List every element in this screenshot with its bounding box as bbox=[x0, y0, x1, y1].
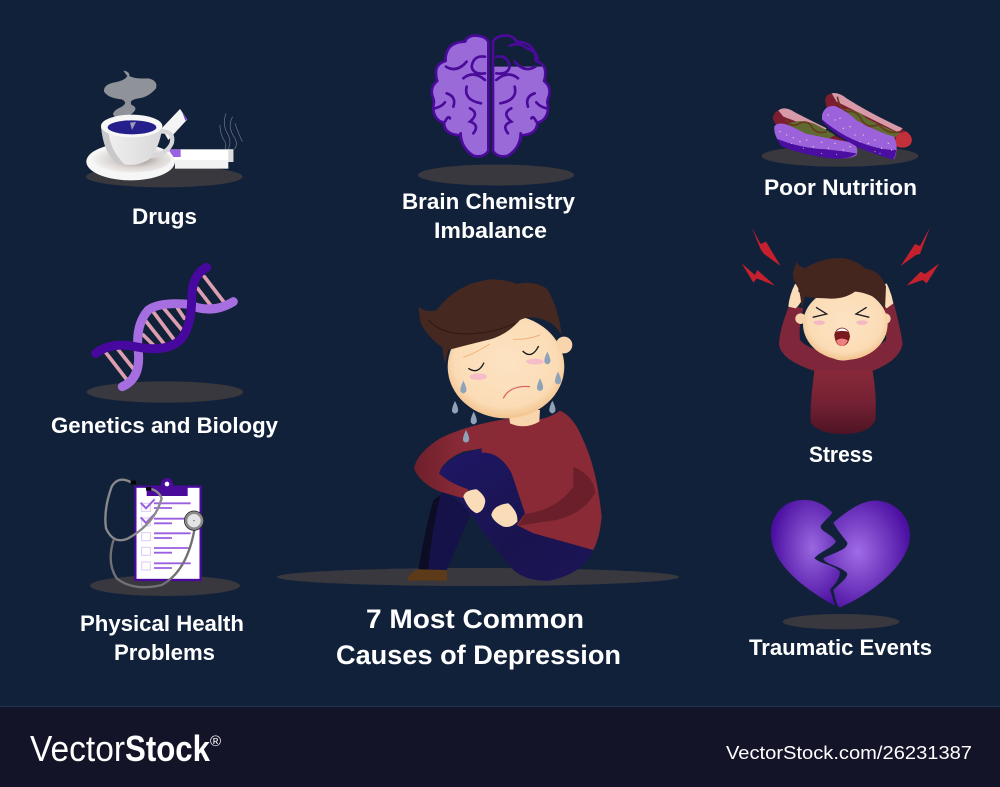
ear tips bbox=[131, 481, 136, 484]
shadow bbox=[90, 575, 240, 596]
mouth bbox=[503, 386, 530, 398]
blush bbox=[470, 373, 487, 380]
label: Stress: Stress bbox=[809, 442, 873, 467]
head bbox=[803, 288, 888, 360]
neck bbox=[508, 410, 540, 426]
right hot dog bbox=[822, 93, 912, 160]
label: Physical Health Problems bbox=[80, 611, 244, 665]
right piece bbox=[823, 501, 910, 607]
shadow bbox=[783, 614, 899, 629]
mouth bbox=[834, 328, 850, 346]
shadow bbox=[762, 145, 918, 167]
icon: stress (man holding head) bbox=[742, 227, 939, 434]
icon: genetics (DNA helix) bbox=[87, 267, 243, 403]
label: Brain Chemistry Imbalance: Brain Chemistry bbox=[402, 189, 576, 214]
thin smoke bbox=[220, 113, 242, 149]
stethoscope tubes bbox=[105, 480, 194, 587]
check marks bbox=[141, 499, 155, 523]
icon: brain bbox=[432, 36, 550, 156]
brows bbox=[463, 335, 540, 357]
footer bar bbox=[0, 706, 1000, 787]
icon: poor nutrition (hot dogs) bbox=[762, 93, 918, 167]
steam bbox=[104, 71, 156, 117]
footer logo bbox=[30, 728, 221, 769]
label: Drugs: Drugs bbox=[132, 204, 197, 229]
icon: drugs (coffee and cigarettes) bbox=[86, 71, 243, 187]
label: Poor Nutrition: Poor Nutrition bbox=[764, 175, 917, 200]
shoes bbox=[407, 569, 447, 581]
central figure: crying man bbox=[407, 279, 602, 581]
torso bbox=[482, 411, 602, 550]
shadow bbox=[87, 381, 243, 403]
cigarette behind cup bbox=[162, 109, 187, 140]
back leg bbox=[418, 490, 472, 570]
cup handle bbox=[148, 131, 172, 157]
label: Traumatic Events: Traumatic Events bbox=[749, 635, 932, 660]
hands bbox=[463, 489, 485, 513]
cigarettes bbox=[168, 149, 233, 162]
left piece bbox=[771, 500, 840, 606]
left hemisphere bbox=[432, 36, 488, 156]
title: Causes of Depression bbox=[336, 640, 621, 670]
clip bbox=[147, 478, 188, 496]
label: Physical Health Problems: Physical Health bbox=[80, 611, 244, 636]
left hot dog bbox=[773, 108, 857, 159]
ear bbox=[556, 337, 572, 353]
sweater bbox=[811, 367, 876, 434]
icon: physical health (clipboard and stethoscope) bbox=[90, 478, 240, 596]
brain folds bbox=[435, 44, 546, 140]
footer logo: ® bbox=[210, 733, 221, 750]
icon: traumatic events (broken heart) bbox=[771, 500, 910, 629]
hair bbox=[793, 258, 886, 310]
clipboard bbox=[135, 487, 201, 580]
right hemisphere fill bbox=[494, 66, 548, 155]
hands bbox=[788, 284, 803, 308]
label: Physical Health Problems: Problems bbox=[114, 640, 215, 665]
coffee bbox=[108, 120, 156, 134]
shadow bbox=[86, 166, 243, 187]
arm shading bbox=[518, 467, 595, 526]
light strand bbox=[122, 302, 233, 387]
dark strand bbox=[96, 267, 207, 353]
blush bbox=[814, 320, 825, 325]
hair bbox=[418, 279, 562, 363]
check boxes bbox=[142, 503, 150, 570]
ground shadow bbox=[277, 568, 679, 586]
tears bbox=[452, 352, 561, 443]
right hemisphere outline bbox=[493, 36, 550, 156]
footer logo: Vector bbox=[30, 728, 125, 769]
ears bbox=[795, 313, 806, 324]
lightning bolts bbox=[742, 227, 939, 286]
saucer bbox=[86, 143, 175, 180]
chest piece bbox=[184, 511, 204, 530]
footer logo: Stock bbox=[125, 728, 211, 769]
cup body bbox=[101, 126, 162, 165]
brain shadow bbox=[418, 164, 574, 186]
eyes bbox=[468, 346, 539, 371]
title: 7 Most Common bbox=[366, 604, 584, 634]
front arm bbox=[414, 418, 510, 498]
list lines bbox=[154, 503, 191, 568]
label: Genetics and Biology: Genetics and Biology bbox=[51, 413, 279, 438]
neck bbox=[833, 353, 853, 360]
rungs bbox=[106, 277, 227, 382]
sesame seeds bbox=[779, 114, 892, 155]
eyes bbox=[813, 307, 869, 317]
title bbox=[336, 604, 621, 670]
footer url: VectorStock.com/26231387 bbox=[726, 743, 972, 763]
head bbox=[448, 315, 564, 418]
front leg bbox=[438, 449, 593, 581]
label: Brain Chemistry Imbalance: Imbalance bbox=[434, 218, 547, 243]
label: Brain Chemistry Imbalance bbox=[402, 189, 576, 243]
